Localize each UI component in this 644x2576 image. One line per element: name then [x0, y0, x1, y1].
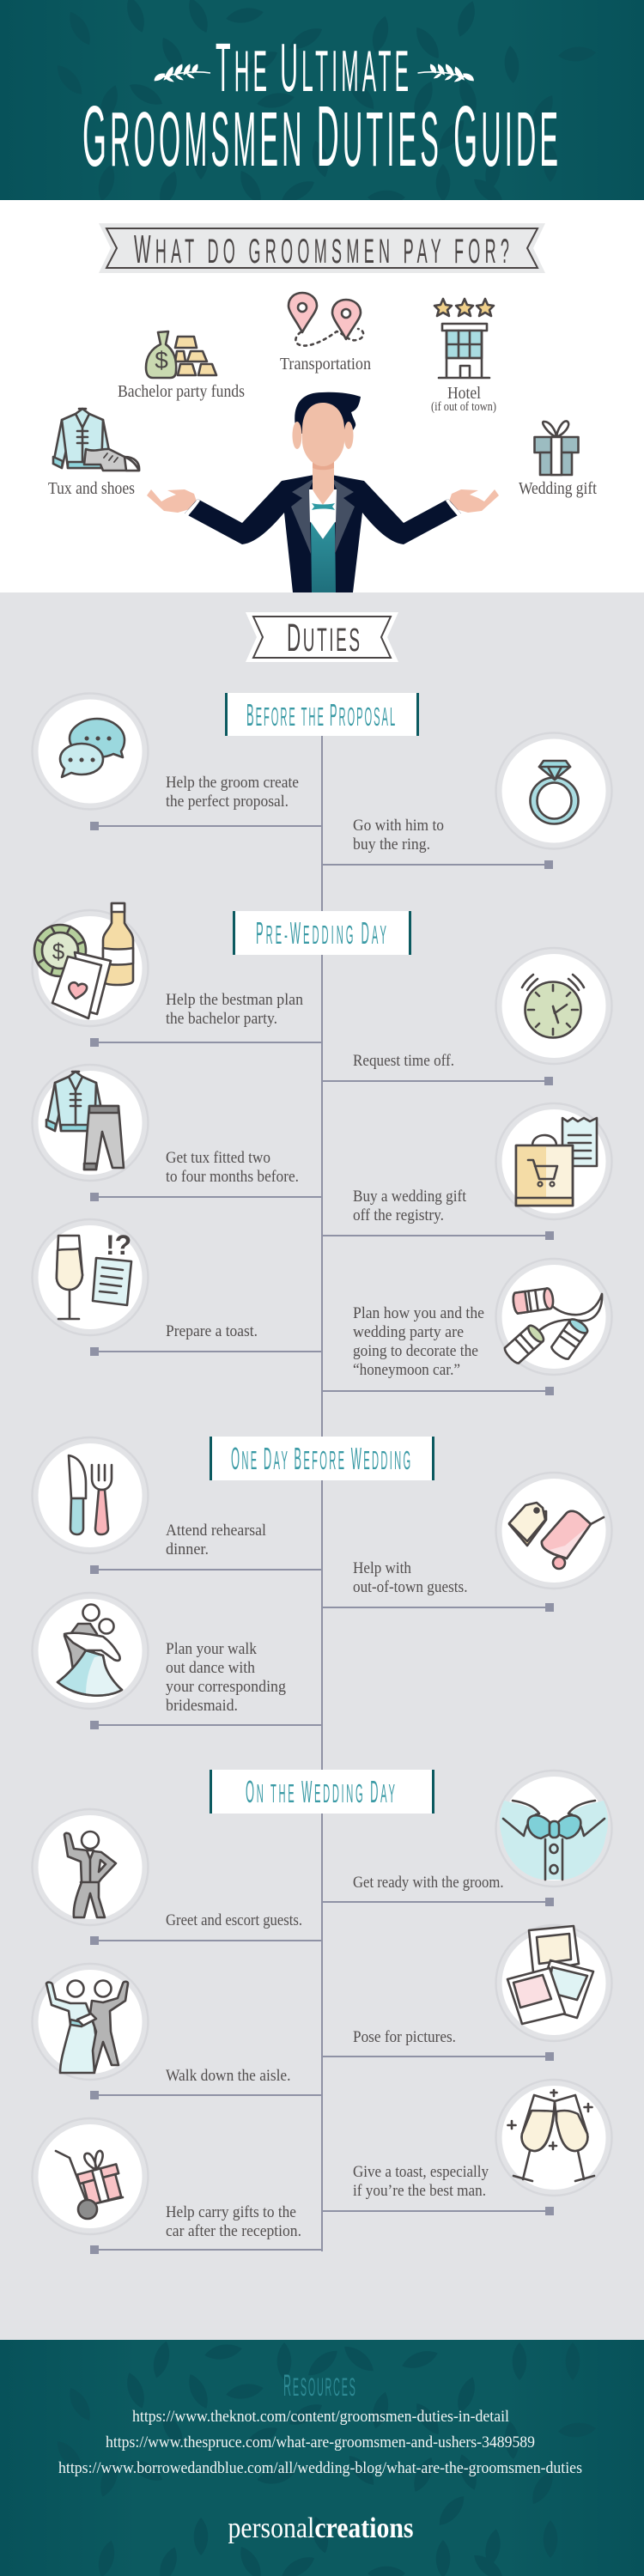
text: attend rehearsal dinner: Attend rehearsal: [166, 1522, 266, 1540]
text: help the bestman: Help the bestman plan: [166, 992, 303, 1009]
label: Hotel: (if out of town): [431, 400, 496, 414]
resource links: [58, 2408, 582, 2477]
text: buy a wedding gift: [353, 1188, 467, 1224]
icon: tux jacket and pants: [46, 1072, 124, 1170]
text: plan walk out dance: out dance with: [166, 1660, 255, 1677]
text: plan honeymoon car: “honeymoon car.”: [353, 1362, 460, 1379]
section heading: One Day Before Wedding: ONE DAY BEFORE WEDDING: [231, 1442, 410, 1476]
text: go with him: buy the ring.: [353, 836, 430, 854]
text: plan honeymoon car: going to decorate the: [353, 1343, 478, 1360]
icon: dancing couple: [58, 1604, 122, 1696]
text: buy a wedding gift: off the registry.: [353, 1207, 444, 1224]
icon: tin cans: [503, 1288, 602, 1365]
text: plan walk out dance: [166, 1641, 286, 1715]
text: help with guests: Help with: [353, 1560, 411, 1577]
text: get tux fitted: [166, 1150, 299, 1186]
icon: speech bubbles: [60, 719, 125, 777]
icon: clinking champagne glasses: [508, 2090, 594, 2181]
icon: right sprig: [417, 64, 474, 82]
text: give a toast: [353, 2164, 489, 2200]
title: [82, 29, 558, 184]
footer panel: [0, 2340, 644, 2576]
text: help the bestman: the bachelor party.: [166, 1011, 277, 1028]
text: help the bestman: [166, 992, 303, 1028]
icon: chip, bottle and card: $: [52, 939, 65, 964]
icon: chip, bottle and card: [34, 903, 133, 1018]
section heading: Before the Proposal: [225, 693, 419, 736]
icon: money bag and gold: [146, 331, 216, 378]
icon: champagne flute and notes: !?: [106, 1230, 131, 1261]
text: go with him: Go with him to: [353, 817, 444, 835]
section heading: Pre-Wedding Day: [233, 911, 411, 955]
text: plan walk out dance: bridesmaid.: [166, 1698, 238, 1715]
label: Hotel: Hotel: [447, 384, 481, 403]
text: buy a wedding gift: Buy a wedding gift: [353, 1188, 467, 1206]
icon: three-star hotel: [434, 299, 494, 378]
icon: luggage tags: [509, 1503, 604, 1569]
text: get tux fitted: to four months before.: [166, 1169, 299, 1186]
icon: polaroid photos: [507, 1926, 593, 2024]
text: prepare a toast: Prepare a toast.: [166, 1323, 258, 1340]
icon: left sprig: [155, 64, 210, 82]
text: help the groom: Help the groom create: [166, 775, 299, 792]
timeline: central line and connectors: [90, 736, 554, 2254]
text: attend rehearsal dinner: [166, 1522, 266, 1558]
heading ribbon: WHAT DO GROOMSMEN PAY FOR?: [134, 228, 509, 271]
text: go with him: [353, 817, 444, 854]
text: help with guests: [353, 1560, 467, 1596]
icon: diamond ring: [531, 761, 579, 824]
text: request time off: Request time off.: [353, 1053, 454, 1070]
logo: personal creations: personalcreations: [228, 2512, 414, 2544]
label: Bachelor party funds: Bachelor party funds: [118, 382, 245, 401]
resource links: https://www.borrowedandblue.com/all/wedding-blog/what-are-the-groomsmen-duties: [58, 2459, 582, 2477]
icon: champagne flute and notes: [57, 1230, 131, 1319]
section heading: Pre-Wedding Day: PRE-WEDDING DAY: [256, 916, 386, 951]
icon: bow tie and shirt: [500, 1801, 608, 1880]
icon: alarm clock: [522, 975, 584, 1037]
resource links: https://www.thespruce.com/what-are-groomsmen-and-ushers-3489589: [106, 2433, 535, 2451]
icon: tux and shoe: [53, 409, 139, 471]
icon: wedding gift: [534, 422, 579, 475]
icon: knife and fork: [69, 1455, 112, 1534]
icon: map pins: [289, 293, 363, 346]
icon: groomsman standing: [64, 1832, 116, 1917]
illustration: groom shrugging: [147, 392, 499, 592]
title: GROOMSMEN DUTIES GUIDE: [82, 88, 558, 184]
section heading: On the Wedding Day: [210, 1770, 434, 1814]
panel: what groomsmen pay for: [0, 200, 644, 592]
section heading: One Day Before Wedding: [210, 1437, 434, 1480]
label: Tux and shoes: Tux and shoes: [48, 479, 135, 498]
text: help carry gifts: car after the reception.: [166, 2223, 301, 2240]
text: plan honeymoon car: Plan how you and the: [353, 1305, 484, 1322]
text: help the groom: [166, 775, 299, 811]
text: give a toast: if you’re the best man.: [353, 2183, 486, 2200]
text: pose for pictures: Pose for pictures.: [353, 2029, 456, 2046]
icon circles: backgrounds: [33, 694, 611, 2234]
heading: Duties ribbon: DUTIES: [287, 617, 360, 659]
text: greet and escort: Greet and escort guests.: [166, 1912, 302, 1929]
heading: Duties ribbon: [246, 612, 398, 662]
text: plan walk out dance: Plan your walk: [166, 1641, 258, 1658]
text: help with guests: out-of-town guests.: [353, 1579, 467, 1596]
title: THE ULTIMATE: [216, 29, 409, 106]
label: Wedding gift: Wedding gift: [519, 479, 597, 498]
text: get tux fitted: Get tux fitted two: [166, 1150, 270, 1167]
icon: money bag and gold: $: [155, 347, 168, 374]
text: plan walk out dance: your corresponding: [166, 1679, 286, 1696]
icon: gift on hand truck: [56, 2147, 125, 2219]
text: give a toast: Give a toast, especially: [353, 2164, 489, 2181]
text: help carry gifts: [166, 2204, 301, 2240]
icon: couple walking down aisle: [46, 1980, 128, 2073]
text: help the groom: the perfect proposal.: [166, 793, 289, 811]
label: Hotel: [431, 384, 496, 414]
text: attend rehearsal dinner: dinner.: [166, 1541, 209, 1558]
text: plan honeymoon car: [353, 1305, 484, 1379]
text: walk down aisle: Walk down the aisle.: [166, 2068, 290, 2085]
text: help carry gifts: Help carry gifts to the: [166, 2204, 296, 2221]
text: plan honeymoon car: wedding party are: [353, 1324, 464, 1341]
heading: Resources: RESOURCES: [283, 2368, 355, 2403]
header banner: [0, 0, 644, 209]
resource links: https://www.theknot.com/content/groomsmen-duties-in-detail: [132, 2408, 509, 2426]
label: Transportation: Transportation: [280, 355, 371, 374]
text: get ready: Get ready with the groom.: [353, 1874, 503, 1892]
section heading: On the Wedding Day: ON THE WEDDING DAY: [246, 1775, 395, 1809]
section heading: Before the Proposal: BEFORE THE PROPOSAL: [246, 698, 395, 732]
icon: shopping bag and receipt: [516, 1118, 597, 1206]
